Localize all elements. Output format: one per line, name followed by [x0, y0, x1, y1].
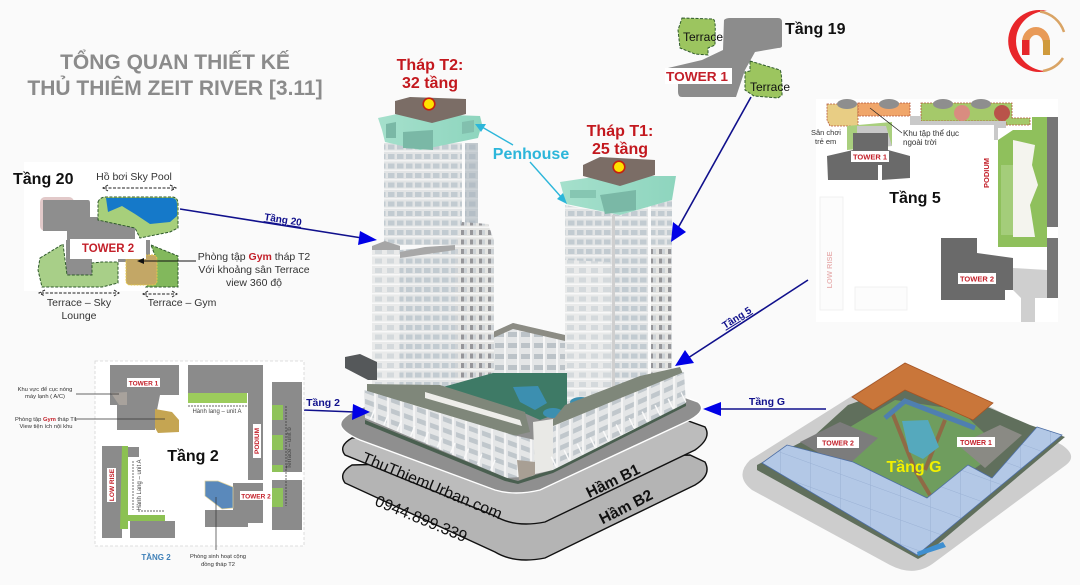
title: THỦ THIÊM ZEIT RIVER [3.11] — [27, 76, 323, 100]
floor 2 tower 2 label: TOWER 2 — [241, 494, 271, 500]
label: Hầm B2: Hầm B2 — [597, 487, 656, 528]
podium green rim — [365, 403, 686, 484]
floor G tower 1 block — [958, 425, 1022, 468]
floor 5 playground — [827, 104, 858, 126]
floor 5 playground label: Sân chơi — [811, 128, 841, 137]
arrow: floor 19 — [671, 97, 751, 242]
label: Penhouse — [475, 124, 569, 204]
floor G inner rim — [757, 385, 1065, 559]
podium corner column — [533, 419, 553, 474]
podium columns — [372, 397, 684, 470]
floor 2 low rise label: LOW RISE — [109, 468, 116, 501]
arrow: floor G — [703, 396, 826, 416]
floor 5 tower 2 block — [941, 238, 1013, 300]
floor 2 community room label: Phòng sinh hoạt cộng — [190, 554, 246, 560]
panel: floor 5 plan — [811, 99, 1058, 322]
floor 19 terrace lower: Terrace — [750, 80, 790, 94]
floor 5 paving — [1013, 268, 1047, 322]
floor G plate — [742, 367, 1071, 571]
floor 20 sky lounge terrace — [38, 244, 118, 287]
floor G orange block — [852, 363, 993, 420]
floor 2 tower 2 block — [205, 483, 263, 527]
podium courtyard — [443, 373, 567, 420]
floor 2 small annotations — [137, 409, 293, 511]
floor 2 community room label — [190, 554, 246, 568]
floor 20 sky pool terrace — [98, 197, 178, 238]
floor 20 gym pointer — [137, 258, 196, 264]
podium right wall — [553, 372, 686, 470]
tower T1 — [560, 157, 676, 410]
floor 2 terrace units — [272, 405, 283, 507]
floor 5 tower 2 label: TOWER 2 — [960, 274, 994, 284]
floor 2 corridor B — [120, 446, 165, 529]
floor G canal — [885, 401, 975, 428]
title: TỔNG QUAN THIẾT KẾ — [60, 50, 290, 74]
floor 5 gym label — [903, 129, 959, 147]
label: tower T1: Tháp T1: — [587, 123, 653, 140]
floor 20 annotations: Terrace – Sky — [47, 297, 112, 309]
floor 5 podium side strip — [1047, 117, 1058, 298]
floor G paths — [892, 412, 945, 495]
floor 2 tower 2 label — [240, 491, 272, 500]
floor G tower 1 label: TOWER 1 — [960, 440, 992, 447]
floor G pool — [902, 420, 939, 459]
floor 5 gym label: Khu tập thể dục — [903, 129, 959, 138]
podium right roof — [553, 367, 684, 428]
floor 19 tower block — [668, 18, 782, 97]
arrow: floor 5 — [675, 280, 808, 366]
floor 5 podium label: PODIUM — [982, 158, 991, 188]
floor 5 playground label: trẻ em — [815, 137, 836, 146]
floor 2 AC area — [111, 392, 127, 405]
floor G tower 1 label — [957, 437, 995, 447]
ground plate — [341, 392, 702, 493]
heading: floor 5: Tầng 5 — [889, 190, 941, 207]
podium building — [345, 354, 686, 484]
floor 5 gym zone — [858, 103, 910, 116]
heading: floor 20: Tầng 20 — [13, 171, 74, 188]
label: tower T2 — [397, 57, 463, 92]
floor 2 small annotations: Terrace – unit b — [287, 427, 293, 469]
floor 20 annotations — [47, 171, 310, 322]
floor 2 AC label: Khu vực để cục nóng — [18, 386, 72, 393]
tower T2 roof — [395, 97, 466, 123]
title — [27, 50, 323, 100]
floor 5 low rise ghost — [820, 197, 907, 310]
floor 5 pods — [837, 99, 991, 109]
heading: floor 19: Tầng 19 — [785, 21, 846, 38]
label: tower T2: Tháp T2: — [397, 57, 463, 74]
arrow: penthouse T1 — [530, 162, 567, 204]
floor 2 corridor A — [188, 393, 247, 403]
floor 5 playground label — [811, 128, 841, 146]
tower T1 penthouse — [560, 176, 676, 215]
floor 20 annotations: view 360 độ — [226, 277, 282, 289]
panel: floor 2 plan — [74, 361, 304, 550]
floor 20 tower 2 label: TOWER 2 — [82, 243, 134, 255]
podium pools — [513, 386, 592, 418]
basement level B1 — [343, 418, 707, 524]
floor G heading: Tầng G — [886, 459, 942, 476]
floor 5 gym label: ngoài trời — [903, 138, 937, 147]
label: website: ThuThiemUrban.com — [359, 450, 504, 523]
tower T2 penthouse — [378, 113, 482, 150]
label: Hầm B1: Hầm B1 — [584, 461, 643, 502]
icon: company logo — [1008, 10, 1064, 72]
arrow: penthouse T2 — [475, 124, 513, 145]
heading: floor 2: Tầng 2 — [167, 448, 219, 465]
floor 5 tower 1 garden — [847, 122, 892, 150]
floor 2 caption: TẦNG 2 — [141, 552, 171, 562]
floor G courtyard — [820, 400, 1002, 500]
floor 2 gym label: View tiện ích nội khu — [19, 424, 73, 430]
floor 2 right column — [272, 382, 302, 530]
panel: floor 20 plan — [24, 162, 196, 297]
floor 2 small annotations: Hành lang – unit A — [192, 409, 242, 415]
floor 20 annotations: Phòng tập Gym tháp T2 — [198, 251, 310, 263]
floor 20 dimension arrows — [39, 185, 177, 297]
floor G tower 2 label: TOWER 2 — [822, 440, 854, 448]
floor 5 low rise label: LOW RISE — [825, 251, 834, 289]
floor 5 tower 1 label: TOWER 1 — [853, 152, 887, 162]
floor 20 tower 2 label — [70, 239, 146, 259]
podium side stack — [345, 354, 377, 380]
floor 2 gym label: Phòng tập Gym tháp T1 — [15, 417, 77, 423]
floor 2 gym label — [15, 417, 77, 430]
floor 2 podium label — [253, 424, 261, 458]
tower T2 marker — [423, 98, 435, 110]
back podium building — [493, 323, 565, 385]
tower T1 marker — [613, 161, 625, 173]
floor 5 tower 1 block — [827, 133, 910, 180]
arrow: floor 20 — [180, 209, 377, 245]
arrow label: floor 5: Tầng 5 — [720, 304, 754, 332]
label: tower T1 — [587, 123, 653, 158]
label: tower T1: 25 tầng — [592, 141, 648, 158]
basement level B2 — [343, 455, 707, 560]
label: phone number: 0944.899.339 — [372, 493, 469, 546]
podium left roof — [367, 384, 530, 436]
floor 20 gym room — [126, 255, 157, 285]
floor 2 community room — [205, 481, 233, 509]
tower T1 roof — [583, 157, 655, 186]
floor G canal corner — [917, 542, 946, 556]
floor 19 tower 1 label: TOWER 1 — [666, 69, 728, 84]
floor 2 tower 1 block — [110, 365, 179, 430]
floor 2 podium block — [188, 365, 263, 480]
floor 19 terrace upper: Terrace — [683, 30, 723, 44]
floor 2 podium label: PODIUM — [254, 428, 261, 454]
tower T2 lower wings — [372, 242, 400, 395]
floor G tower 2 label — [817, 437, 859, 448]
floor 2 small annotations: Hành Lang – unit A — [137, 459, 143, 511]
floor 20 pink outline — [40, 197, 74, 231]
floor 5 podium garden — [998, 117, 1047, 247]
floor 2 low rise block — [102, 446, 175, 538]
floor 2 AC label — [18, 386, 72, 400]
arrow label: floor G: Tầng G — [749, 396, 785, 408]
label: Penhouse: Penhouse — [493, 146, 569, 163]
floor 20 annotations: Hồ bơi Sky Pool — [96, 171, 172, 183]
floor 2 AC label: máy lạnh ( A/C) — [25, 394, 65, 400]
floor 2 tower 1 label: TOWER 1 — [129, 380, 159, 388]
floor 20 annotations: Với khoảng sân Terrace — [198, 264, 310, 276]
floor 5 green strip — [921, 103, 1030, 125]
tower T2 upper shaft — [384, 143, 478, 245]
floor 20 annotations: Terrace – Gym — [148, 297, 217, 309]
floor 20 annotations: Lounge — [61, 310, 97, 322]
floor 2 tower 1 label — [127, 378, 160, 388]
floor 2 pointers — [74, 394, 286, 550]
floor 20 building block — [43, 200, 150, 275]
panel: floor 19 plan — [665, 18, 790, 98]
floor 2 gym T1 — [155, 409, 179, 433]
panel: ground floor G plan — [742, 363, 1071, 571]
floor G blue retail band — [762, 427, 1062, 555]
floor 2 community room label: đồng tháp T2 — [201, 562, 235, 568]
floor G tower 2 block — [800, 422, 878, 468]
arrow label: floor 2: Tầng 2 — [306, 397, 340, 409]
floor 5 gym pointer — [870, 108, 902, 133]
label: tower T2: 32 tầng — [402, 75, 458, 92]
arrow label: floor 20: Tầng 20 — [263, 211, 303, 229]
tower T2 — [372, 97, 494, 400]
arrow: floor 2 — [303, 397, 370, 420]
floor 5 walkway — [910, 116, 1006, 140]
floor 20 gym terrace — [146, 245, 178, 287]
podium left wall — [364, 390, 535, 478]
